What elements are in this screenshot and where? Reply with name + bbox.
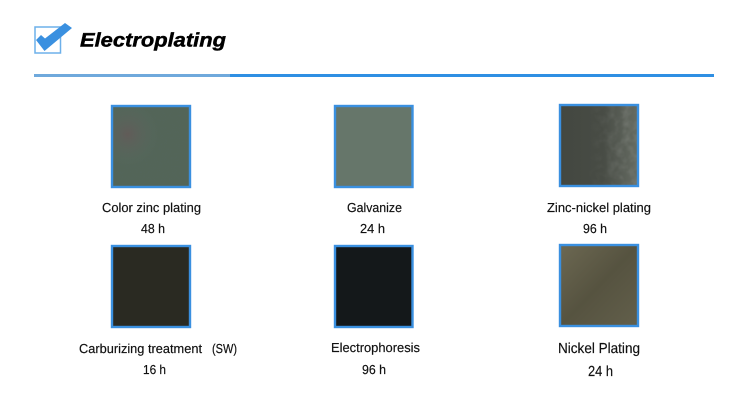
swatch bbox=[335, 246, 412, 327]
label: Electrophoresis bbox=[331, 340, 420, 355]
label: Carburizing treatment bbox=[79, 341, 202, 356]
title: Electroplating bbox=[80, 30, 226, 52]
duration: 24 h bbox=[360, 221, 385, 236]
item: color zinc plating bbox=[102, 106, 201, 236]
label: Color zinc plating bbox=[102, 200, 201, 215]
swatch bbox=[112, 106, 190, 187]
header rule bbox=[34, 74, 714, 77]
swatch bbox=[560, 245, 638, 326]
swatch bbox=[335, 106, 412, 187]
label: (SW) bbox=[212, 341, 237, 356]
duration: 24 h bbox=[588, 364, 613, 380]
item: nickel plating bbox=[558, 245, 640, 380]
duration: 48 h bbox=[141, 221, 165, 236]
section header bbox=[34, 23, 714, 77]
label: Galvanize bbox=[347, 200, 402, 215]
item: galvanize bbox=[335, 106, 412, 236]
duration: 96 h bbox=[362, 362, 386, 377]
duration: 16 h bbox=[143, 362, 166, 377]
label: Zinc-nickel plating bbox=[547, 200, 651, 215]
swatch bbox=[560, 105, 638, 186]
swatch bbox=[112, 246, 190, 327]
item: electrophoresis bbox=[331, 246, 420, 377]
label: Nickel Plating bbox=[558, 341, 640, 357]
item: carburizing treatment bbox=[79, 246, 237, 377]
duration: 96 h bbox=[583, 221, 607, 236]
item: zinc-nickel plating bbox=[547, 105, 651, 236]
icon: blue checkbox bbox=[35, 23, 72, 53]
